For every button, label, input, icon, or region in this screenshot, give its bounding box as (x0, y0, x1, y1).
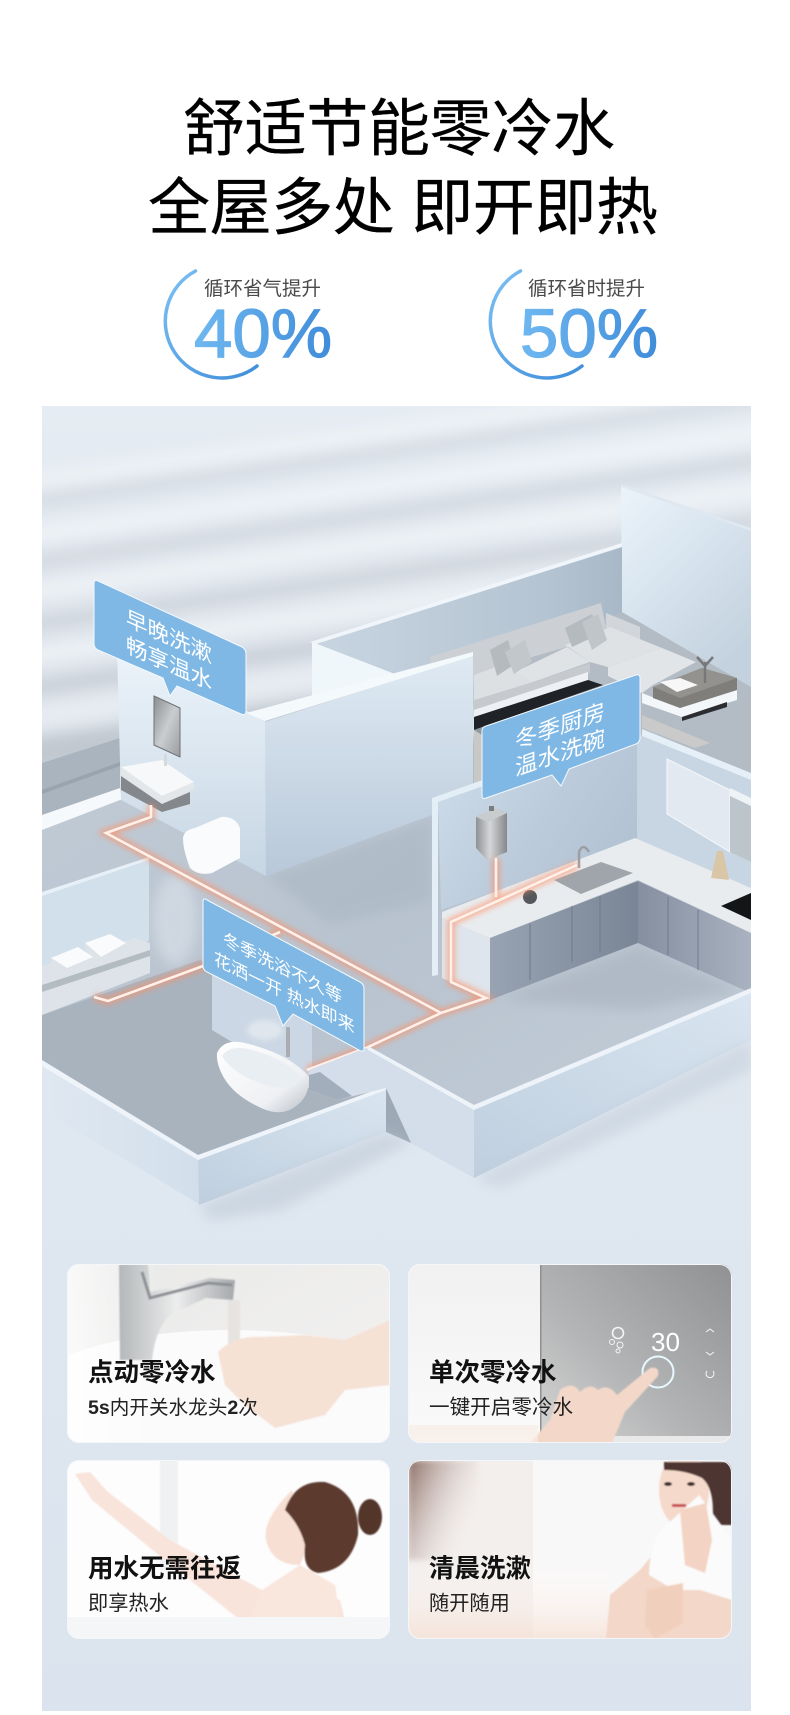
callout: winter kitchen: 冬季厨房 (515, 698, 605, 754)
stat: gas saving 40%: 循环省气提升 (204, 278, 321, 300)
callout: winter bath (203, 899, 364, 1051)
card: tap zero cold water: 5s内开关水龙头2次 (88, 1397, 258, 1419)
card: single zero cold water: 30 (651, 1327, 680, 1357)
water heater (476, 806, 507, 860)
mirror (154, 696, 180, 757)
card: morning wash (408, 1452, 732, 1639)
card: morning wash: 清晨洗漱 (429, 1555, 531, 1583)
sofa (430, 603, 696, 800)
wash basin (121, 754, 194, 812)
card: single zero cold water: 单次零冷水 (429, 1359, 557, 1387)
title: 全屋多处 即开即热 (148, 174, 658, 243)
card: morning wash: 随开随用 (429, 1592, 510, 1615)
title: 舒适节能零冷水 (183, 95, 615, 164)
upper cabinets (667, 759, 751, 862)
woman with towel (606, 1452, 732, 1639)
woman bathing (75, 1472, 382, 1620)
stat: time saving 50%: 循环省时提升 (528, 278, 645, 300)
control panel (610, 1328, 714, 1388)
stat: time saving 50% (490, 271, 658, 378)
floor (42, 733, 748, 1105)
card: tap zero cold water (67, 1264, 390, 1443)
panel: whole-home scene background (42, 406, 751, 1711)
callout: morning wash (94, 580, 246, 715)
callout: winter bath: 冬季洗浴不久等 (223, 929, 342, 1007)
hot water pipes (94, 805, 577, 1070)
living room right wall (621, 484, 751, 690)
toilet (183, 817, 240, 874)
outer walls (42, 988, 751, 1220)
hand (530, 1368, 658, 1443)
living room floor (473, 612, 751, 783)
kitchen walls (432, 724, 751, 976)
card: no round trips: 即享热水 (88, 1592, 169, 1615)
stat: gas saving 40%: 40% (194, 295, 332, 372)
callout: morning wash: 畅享温水 (126, 633, 212, 695)
card photo: faucet (119, 1264, 240, 1370)
title (148, 95, 658, 243)
bathroom walls (117, 648, 473, 876)
rug (642, 715, 710, 748)
bathtub (217, 1020, 309, 1112)
callout: winter kitchen: 温水洗碗 (515, 725, 605, 781)
living room back wall (314, 546, 622, 678)
card photo: hands (218, 1320, 390, 1428)
card: no round trips (67, 1460, 390, 1639)
kitchen counter and cabinets (442, 838, 751, 1000)
left wash room (42, 857, 150, 1015)
coffee table (642, 657, 737, 721)
card: single zero cold water (408, 1264, 732, 1443)
white wall stub (312, 642, 394, 696)
balcony glass railing (42, 738, 121, 830)
bath room floor (42, 960, 386, 1158)
stat: time saving 50%: 50% (520, 295, 658, 372)
wall behind bathtub (212, 975, 312, 1090)
callout: morning wash: 早晚洗漱 (126, 606, 212, 668)
card: tap zero cold water: 点动零冷水 (88, 1359, 216, 1387)
card: no round trips: 用水无需往返 (88, 1555, 241, 1583)
stat: gas saving 40% (165, 271, 332, 378)
callout: winter bath: 花洒一开 热水即来 (214, 949, 355, 1037)
callout: winter kitchen (482, 675, 640, 799)
card: single zero cold water: 一键开启零冷水 (429, 1396, 574, 1419)
card photo: sink (95, 1330, 389, 1442)
